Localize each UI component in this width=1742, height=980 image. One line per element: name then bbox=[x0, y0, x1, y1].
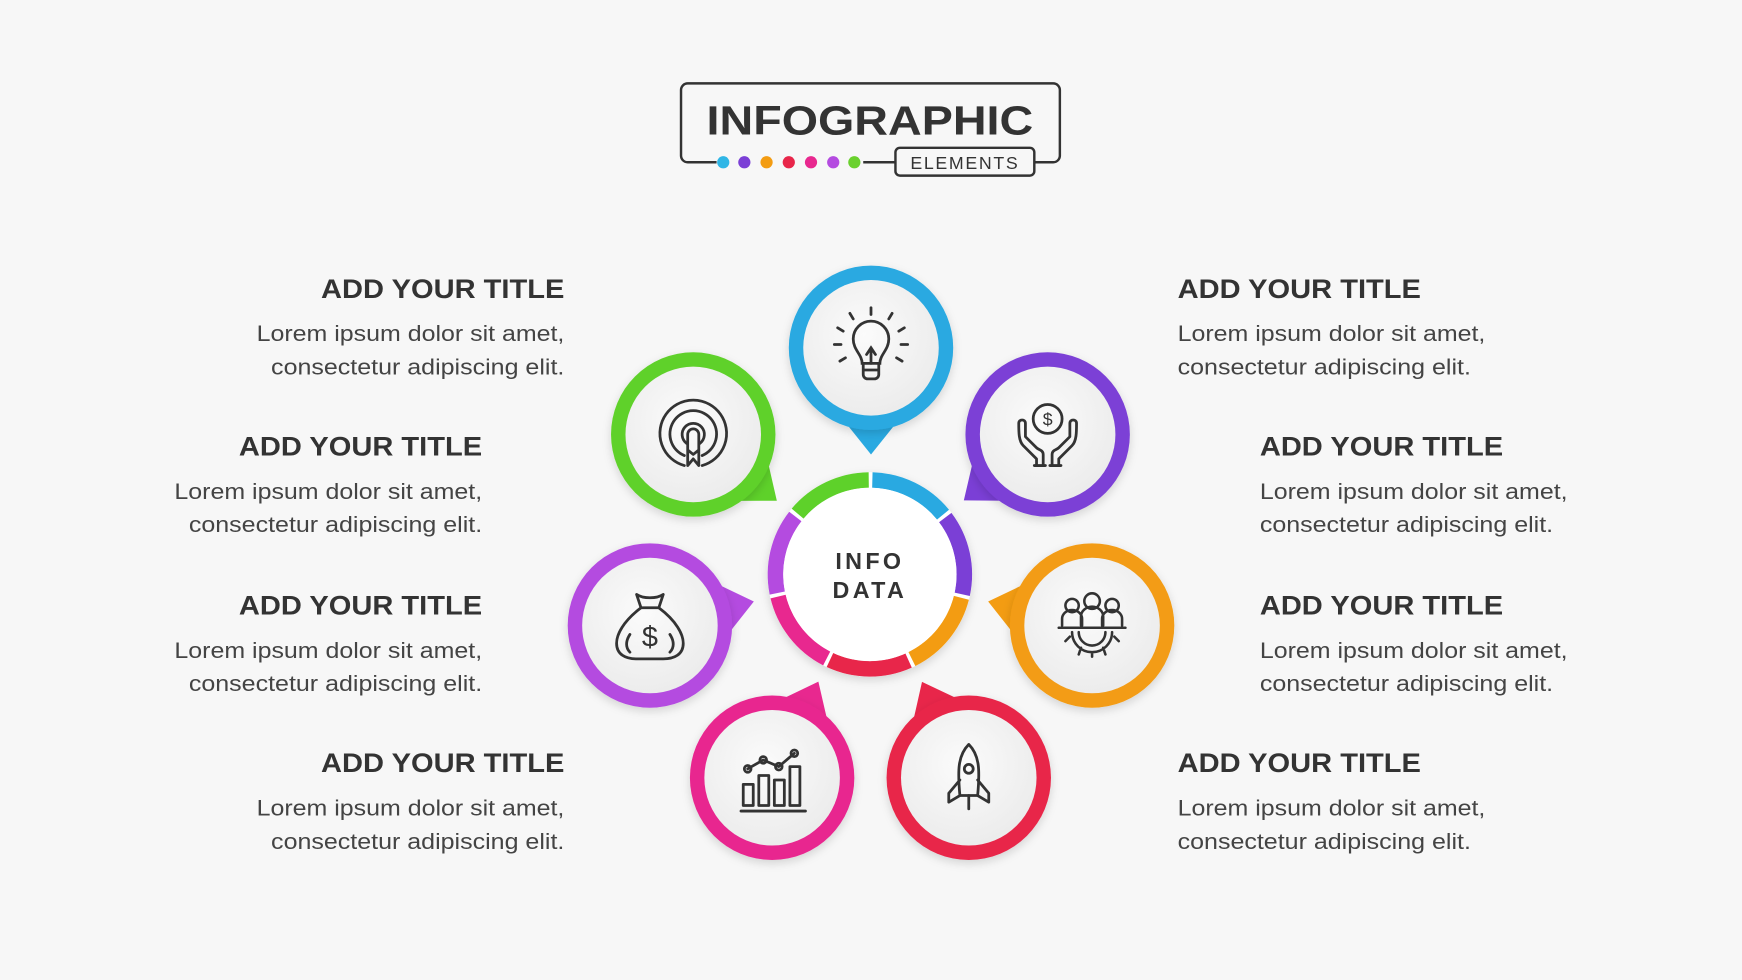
text: left 1 bbox=[257, 274, 564, 379]
icon: team with gear bbox=[1059, 593, 1125, 657]
title: INFOGRAPHIC bbox=[707, 97, 1033, 143]
text: right 4 bbox=[1178, 748, 1485, 854]
text: left 4: ADD YOUR TITLE bbox=[321, 748, 564, 778]
icon: hands with coin: $ bbox=[1043, 410, 1053, 430]
node: pink chart bbox=[690, 670, 854, 860]
text: right 1: Lorem ipsum dolor sit amet, bbox=[1178, 321, 1485, 346]
text: left 1: ADD YOUR TITLE bbox=[321, 274, 564, 304]
text: right 2 bbox=[1260, 432, 1568, 537]
text: left 3: consectetur adipiscing elit. bbox=[189, 671, 482, 696]
text: left 4: Lorem ipsum dolor sit amet, bbox=[257, 796, 564, 821]
text: right 2: ADD YOUR TITLE bbox=[1260, 432, 1503, 462]
text: right 4: consectetur adipiscing elit. bbox=[1178, 829, 1471, 854]
icon: money bag: $ bbox=[642, 622, 658, 654]
title: ELEMENTS bbox=[910, 153, 1019, 173]
title bbox=[681, 83, 1060, 176]
text: left 2 bbox=[174, 432, 482, 537]
text: right 1: ADD YOUR TITLE bbox=[1178, 274, 1421, 304]
node: orange team bbox=[982, 543, 1174, 708]
node: violet money bag bbox=[568, 543, 760, 708]
text: left 1: consectetur adipiscing elit. bbox=[271, 354, 564, 379]
center circle bbox=[737, 441, 1003, 707]
icon: target bbox=[660, 400, 727, 466]
text: left 3: ADD YOUR TITLE bbox=[239, 590, 482, 620]
text: right 4: ADD YOUR TITLE bbox=[1178, 748, 1421, 778]
text: left 2: consectetur adipiscing elit. bbox=[189, 512, 482, 537]
icon: hands with coin bbox=[1019, 404, 1077, 466]
center circle: INFO bbox=[835, 548, 904, 574]
icon: money bag bbox=[617, 594, 683, 659]
icon: rocket bbox=[949, 744, 989, 809]
node: purple hands bbox=[947, 352, 1130, 521]
text: left 4: consectetur adipiscing elit. bbox=[271, 829, 564, 854]
text: left 1: Lorem ipsum dolor sit amet, bbox=[257, 321, 564, 346]
text: right 4: Lorem ipsum dolor sit amet, bbox=[1178, 796, 1485, 821]
node: green target bbox=[611, 352, 793, 522]
text: left 3: Lorem ipsum dolor sit amet, bbox=[174, 638, 482, 663]
center circle: DATA bbox=[833, 577, 907, 603]
text: right 3: consectetur adipiscing elit. bbox=[1260, 671, 1553, 696]
node: blue idea bbox=[789, 266, 953, 454]
text: right 3: ADD YOUR TITLE bbox=[1260, 590, 1503, 620]
text: right 2: Lorem ipsum dolor sit amet, bbox=[1260, 479, 1568, 504]
icon: light bulb bbox=[834, 308, 908, 379]
icon: bar chart bbox=[741, 750, 805, 811]
text: left 3 bbox=[174, 590, 482, 696]
text: right 1: consectetur adipiscing elit. bbox=[1178, 354, 1471, 379]
text: left 2: ADD YOUR TITLE bbox=[239, 432, 482, 462]
text: right 3 bbox=[1260, 590, 1568, 696]
text: right 3: Lorem ipsum dolor sit amet, bbox=[1260, 638, 1568, 663]
text: left 2: Lorem ipsum dolor sit amet, bbox=[174, 479, 482, 504]
text: right 1 bbox=[1178, 274, 1485, 379]
text: right 2: consectetur adipiscing elit. bbox=[1260, 512, 1553, 537]
node: red rocket bbox=[887, 670, 1051, 860]
text: left 4 bbox=[257, 748, 564, 854]
